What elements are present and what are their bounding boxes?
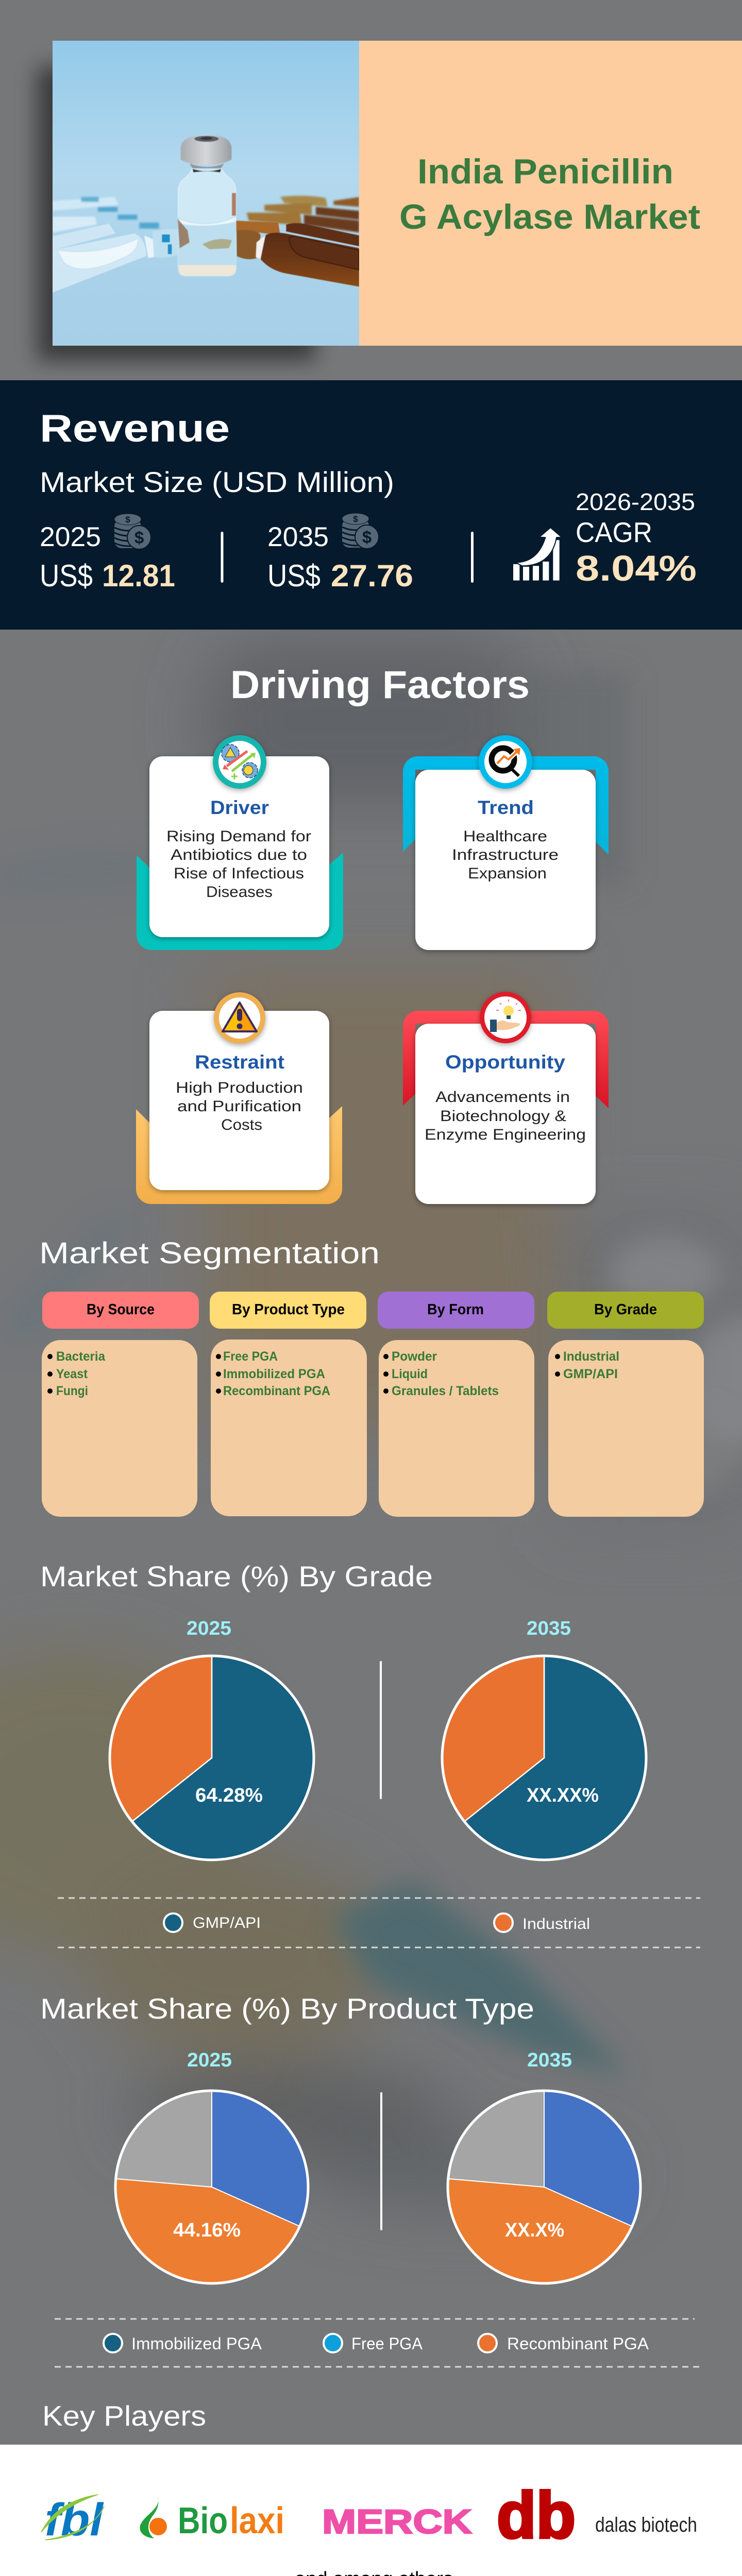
restraint text: and Purification [177, 1098, 301, 1115]
year labels: grade: 2035 [527, 1618, 571, 1639]
segment column: by grade: Industrial [563, 1349, 619, 1364]
segment column: by grade: GMP/API [563, 1367, 618, 1381]
trend title: Trend [478, 797, 534, 818]
segment column: by product type: Immobilized PGA [223, 1367, 325, 1381]
segment column: by grade [547, 1292, 704, 1517]
CAGR: 8.04% [576, 548, 697, 588]
2025 value: 2025 [40, 522, 101, 552]
opportunity text: Enzyme Engineering [425, 1126, 586, 1143]
year labels: product type [187, 2049, 572, 2071]
amber ampoules [236, 196, 359, 286]
segment column: by form [378, 1292, 534, 1517]
heading: market share by grade: Market Share (%) By Grade [40, 1560, 433, 1592]
heading: market segmentation: Market Segmentation [39, 1236, 380, 1270]
pie chart: grade 2035 [442, 1656, 646, 1860]
icon: coins 2025: $ [134, 528, 144, 547]
opportunity text: Biotechnology & [440, 1108, 566, 1125]
title: India Penicillin [417, 152, 673, 191]
banner photo: vial and ampoules [53, 41, 359, 346]
2035 value: 2035 [267, 522, 329, 552]
legend: product type: Immobilized PGA [131, 2334, 262, 2353]
blurred photo background [0, 630, 742, 2220]
restraint text: High Production [176, 1079, 303, 1096]
pie chart: grade 2025: 64.28% [195, 1785, 263, 1806]
market size label: Market Size (USD Million) [40, 466, 394, 498]
icon: trend [479, 735, 532, 789]
icon: coins 2035 [342, 513, 379, 549]
segment column: by product type: Free PGA [223, 1349, 278, 1364]
trend text: Expansion [468, 865, 547, 882]
driver title: Driver [210, 797, 269, 818]
logo: dalas biotech [497, 2479, 697, 2552]
logo: biolaxi: Bio [178, 2500, 228, 2541]
legend: grade [58, 1898, 700, 1947]
pie chart: product type 2025: 44.16% [173, 2219, 241, 2241]
year labels: grade: 2025 [187, 1618, 231, 1639]
logo: dalas biotech: dalas biotech [595, 2514, 697, 2536]
segment column: by source: Fungi [56, 1384, 88, 1398]
legend: product type: Free PGA [351, 2334, 423, 2353]
year labels: grade [187, 1618, 571, 1639]
icon: coins 2025 [114, 514, 151, 549]
banner [53, 41, 742, 346]
card: trend [403, 735, 609, 950]
heading: driving factors: Driving Factors [230, 663, 530, 707]
pie chart: grade 2025 [110, 1656, 314, 1860]
clear ampoules [53, 197, 178, 293]
segment column: by source: Yeast [56, 1367, 88, 1381]
CAGR: 2026-2035 [576, 488, 695, 515]
driver text: Antibiotics due to [171, 846, 307, 863]
opportunity text [425, 1089, 586, 1143]
trend text [452, 828, 559, 882]
logo: biolaxi: laxi [230, 2500, 284, 2541]
segment column: by product type: Recombinant PGA [223, 1384, 330, 1398]
2035 value [267, 522, 413, 593]
driver text: Rising Demand for [166, 828, 311, 845]
vial cap [181, 135, 231, 168]
segment column: by form: Liquid [392, 1367, 428, 1381]
banner title panel [359, 41, 742, 346]
restraint text: Costs [221, 1116, 262, 1133]
opportunity text: Advancements in [435, 1089, 570, 1106]
logo: merck: MERCK [322, 2502, 472, 2540]
banner shadow [37, 67, 315, 361]
driver text: Diseases [206, 884, 273, 901]
divider [471, 532, 474, 583]
icon: opportunity [480, 992, 531, 1043]
segment column: by source [42, 1292, 199, 1517]
icon: growth chart [513, 528, 562, 581]
revenue panel [0, 380, 742, 630]
2025 value [40, 522, 175, 593]
legend: product type [55, 2319, 700, 2367]
pie chart: product type 2035: XX.X% [505, 2219, 564, 2241]
CAGR [576, 488, 697, 588]
trend text: Healthcare [463, 828, 547, 845]
trend text: Infrastructure [452, 846, 559, 863]
segment column: by form: Granules / Tablets [392, 1384, 499, 1398]
driver text [166, 828, 311, 901]
pie chart: product type 2025 [115, 2091, 308, 2283]
pie chart: product type 2035 [448, 2091, 640, 2283]
2035 value: 27.76 [331, 558, 413, 593]
icon: coins 2025: $ [125, 515, 130, 524]
title [399, 152, 700, 236]
card: driver [137, 735, 343, 950]
icon: coins 2035: $ [362, 528, 372, 547]
glass vial [178, 167, 236, 276]
year labels: product type: 2025 [187, 2049, 232, 2071]
segment column: by grade: By Grade [594, 1301, 657, 1318]
card: restraint [136, 992, 342, 1204]
title: G Acylase Market [399, 197, 700, 236]
pie chart: grade 2035: XX.XX% [527, 1785, 599, 1806]
segment column: by form: By Form [427, 1301, 484, 1318]
2025 value: 12.81 [102, 558, 175, 593]
2025 value: US$ [40, 558, 93, 593]
segment column: by product type: By Product Type [232, 1301, 345, 1318]
icon: restraint [214, 992, 265, 1044]
panel: key players logos [0, 2445, 742, 2576]
segment column: by form: Powder [392, 1349, 437, 1364]
segment column: by source: By Source [87, 1301, 155, 1318]
icon: driver [213, 735, 266, 789]
legend: grade: Industrial [522, 1916, 590, 1933]
logo: fbl: fbl [45, 2494, 104, 2545]
2035 value: US$ [267, 558, 321, 593]
logo: biolaxi [140, 2496, 284, 2541]
chart divider [380, 2092, 382, 2230]
driver text: Rise of Infectious [174, 865, 304, 882]
heading: market share by product type: Market Share (%) By Product Type [40, 1992, 534, 2025]
segment column: by product type [210, 1292, 367, 1516]
restraint text [176, 1079, 303, 1133]
legend: grade: GMP/API [193, 1914, 261, 1931]
logo: dalas biotech: db [497, 2479, 576, 2552]
icon: coins 2035: $ [353, 514, 358, 524]
restraint title: Restraint [195, 1052, 284, 1073]
heading: key players: Key Players [42, 2400, 206, 2432]
segment column: by source: Bacteria [56, 1349, 106, 1364]
divider [221, 532, 224, 583]
year labels: product type: 2035 [527, 2049, 572, 2071]
legend: product type: Recombinant PGA [507, 2334, 649, 2353]
CAGR: CAGR [576, 516, 652, 548]
opportunity title: Opportunity [445, 1052, 565, 1073]
chart divider [380, 1661, 382, 1799]
revenue heading: Revenue [40, 406, 230, 450]
card: opportunity [403, 992, 609, 1204]
